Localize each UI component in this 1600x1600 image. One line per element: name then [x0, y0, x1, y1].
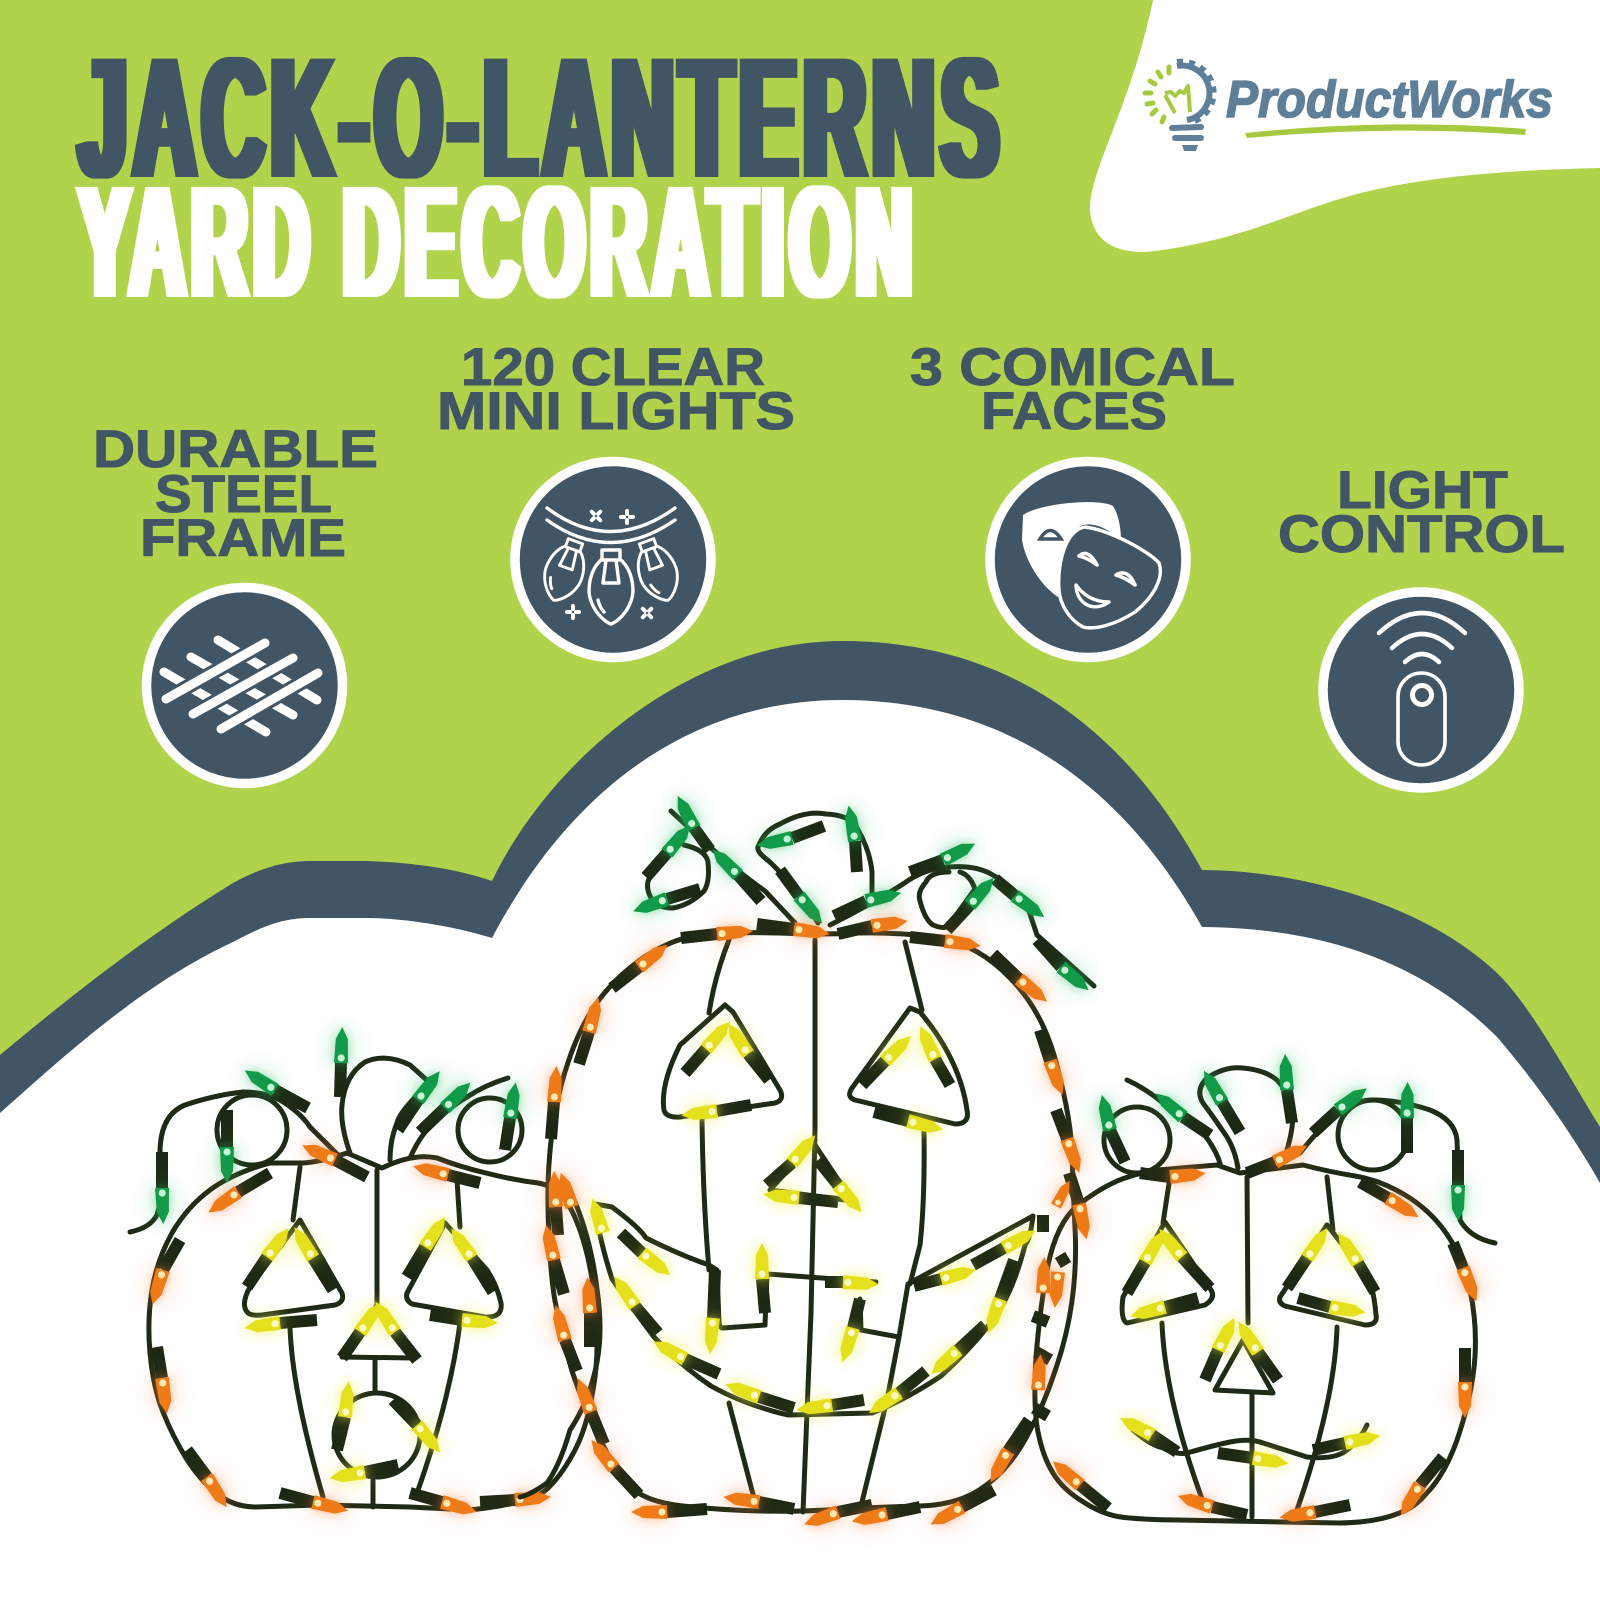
heading: 3 comical faces — [910, 338, 1235, 441]
centre pumpkin bulb sockets — [551, 826, 1079, 1514]
right pumpkin bulb sockets — [1080, 1090, 1465, 1515]
right pumpkin wire frame — [1035, 1068, 1495, 1523]
centre pumpkin yellow bulbs — [586, 1017, 1039, 1419]
logo icon: gear light bulb — [1145, 62, 1214, 151]
heading: 3 comical faces: FACES — [981, 382, 1167, 441]
icon: comedy masks — [990, 462, 1186, 658]
left pumpkin green bulbs — [155, 1027, 523, 1224]
heading: 120 clear mini lights: MINI LIGHTS — [437, 382, 795, 441]
icon: string lights — [515, 462, 711, 658]
left pumpkin wire frame — [130, 1058, 597, 1510]
centre pumpkin wire frame — [520, 811, 1094, 1512]
heading: light control: LIGHT — [1337, 461, 1508, 520]
heading: 120 clear mini lights — [437, 338, 795, 441]
logo wordmark: ProductWorks — [1226, 71, 1553, 129]
right pumpkin yellow bulbs — [1117, 1224, 1382, 1471]
heading: durable steel frame: STEEL — [155, 465, 332, 524]
left pumpkin orange bulbs — [146, 1139, 551, 1519]
centre pumpkin orange bulbs — [539, 914, 1093, 1531]
heading: durable steel frame: FRAME — [140, 509, 346, 568]
right pumpkin orange bulbs — [1048, 1139, 1483, 1525]
icon: steel frame — [146, 588, 342, 784]
logo: ProductWorks — [1145, 62, 1553, 151]
pumpkin: right, smirking face — [1035, 1054, 1495, 1525]
centre pumpkin green bulbs — [631, 793, 1093, 996]
title — [79, 22, 1005, 331]
left pumpkin bulb sockets — [157, 1063, 515, 1502]
hill band: dark outline — [0, 641, 1600, 1600]
logo panel: white blob — [1090, 0, 1600, 252]
heading: light control: CONTROL — [1278, 505, 1565, 564]
heading: 3 comical faces: 3 COMICAL — [910, 338, 1235, 397]
icon: remote control — [1323, 592, 1519, 788]
hill: white panel — [0, 700, 1600, 1600]
pumpkin: left, surprised face — [130, 1027, 597, 1519]
logo swoosh — [1245, 124, 1526, 138]
heading: 120 clear mini lights: 120 CLEAR — [461, 338, 765, 397]
heading: durable steel frame — [93, 420, 378, 568]
pumpkin: centre, big grin — [520, 793, 1094, 1531]
heading: durable steel frame: DURABLE — [93, 420, 378, 479]
heading: light control — [1278, 461, 1565, 564]
right pumpkin green bulbs — [1095, 1054, 1465, 1221]
left pumpkin yellow bulbs — [243, 1213, 498, 1485]
